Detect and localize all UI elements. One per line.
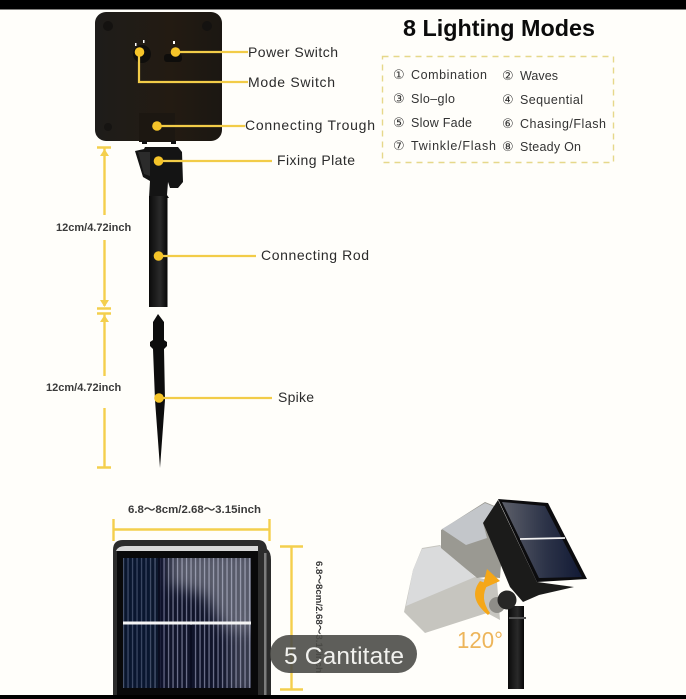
ghost position middle [441,502,501,578]
hinge [489,597,505,613]
dimension: panel height [280,546,324,690]
mode 2: ② [502,69,514,84]
callout: connecting trough [152,117,375,133]
callout: power switch [171,44,338,60]
main body [483,500,574,602]
mode 7: Twinkle/Flash [411,139,496,153]
dimension: connecting rod length: 12cm/4.72inch [56,222,131,234]
icon: solar box back view [95,12,222,144]
callout: fixing plate [154,152,355,168]
title: 8 Lighting Modes [403,15,595,41]
pole [508,606,524,689]
callout: spike [154,389,314,405]
panel: lighting modes list [382,56,614,162]
callout: connecting rod: Connecting Rod [261,247,369,263]
mode 8: Steady On [520,140,581,154]
icon: rotating solar light [404,499,587,689]
mode 5: ⑤ [393,116,405,131]
dimension: spike length: 12cm/4.72inch [46,382,121,394]
overlay pill: quantity: 5 Cantitate [284,643,404,670]
bottom black bar [0,695,686,699]
dimension: panel width [114,504,270,541]
mode 3: ③ [393,92,405,107]
rotation angle label: 120° [457,627,503,653]
ghost position low [404,545,500,633]
callout: mode switch [135,47,335,90]
mode 4: ④ [502,93,514,108]
top black bar [0,0,686,10]
dimension: panel height: 6.8～8cm/2.68～3.15inch [313,561,324,673]
callout: power switch: Power Switch [248,44,338,60]
callout: fixing plate: Fixing Plate [277,152,355,168]
orange arrow [475,581,490,615]
main solar face [498,499,587,582]
mode 8: ⑧ [502,140,514,155]
mode 7: ⑦ [393,139,405,154]
callout: mode switch: Mode Switch [248,74,335,90]
overlay pill: quantity [270,635,417,673]
icon: fixing plate and connecting rod [135,147,183,307]
mode 1: ① [393,68,405,83]
dimension: connecting rod length [56,148,131,308]
mode 3 [393,92,455,107]
mode 4: Sequential [520,93,583,107]
callout: connecting trough: Connecting Trough [245,117,375,133]
mode 6: Chasing/Flash [520,117,606,131]
mode 3: Slo–glo [411,92,455,106]
mode 2 [502,69,558,84]
mode 2: Waves [520,69,558,83]
icon: solar panel front view [113,540,271,695]
mode 5: Slow Fade [411,116,472,130]
callout: connecting rod [154,247,369,263]
dimension: panel width: 6.8～8cm/2.68～3.15inch [128,504,261,516]
callout: spike: Spike [278,389,314,405]
mode 6: ⑥ [502,117,514,132]
dimension: spike length [46,314,121,468]
mode 1: Combination [411,68,487,82]
icon: spike [150,314,167,468]
